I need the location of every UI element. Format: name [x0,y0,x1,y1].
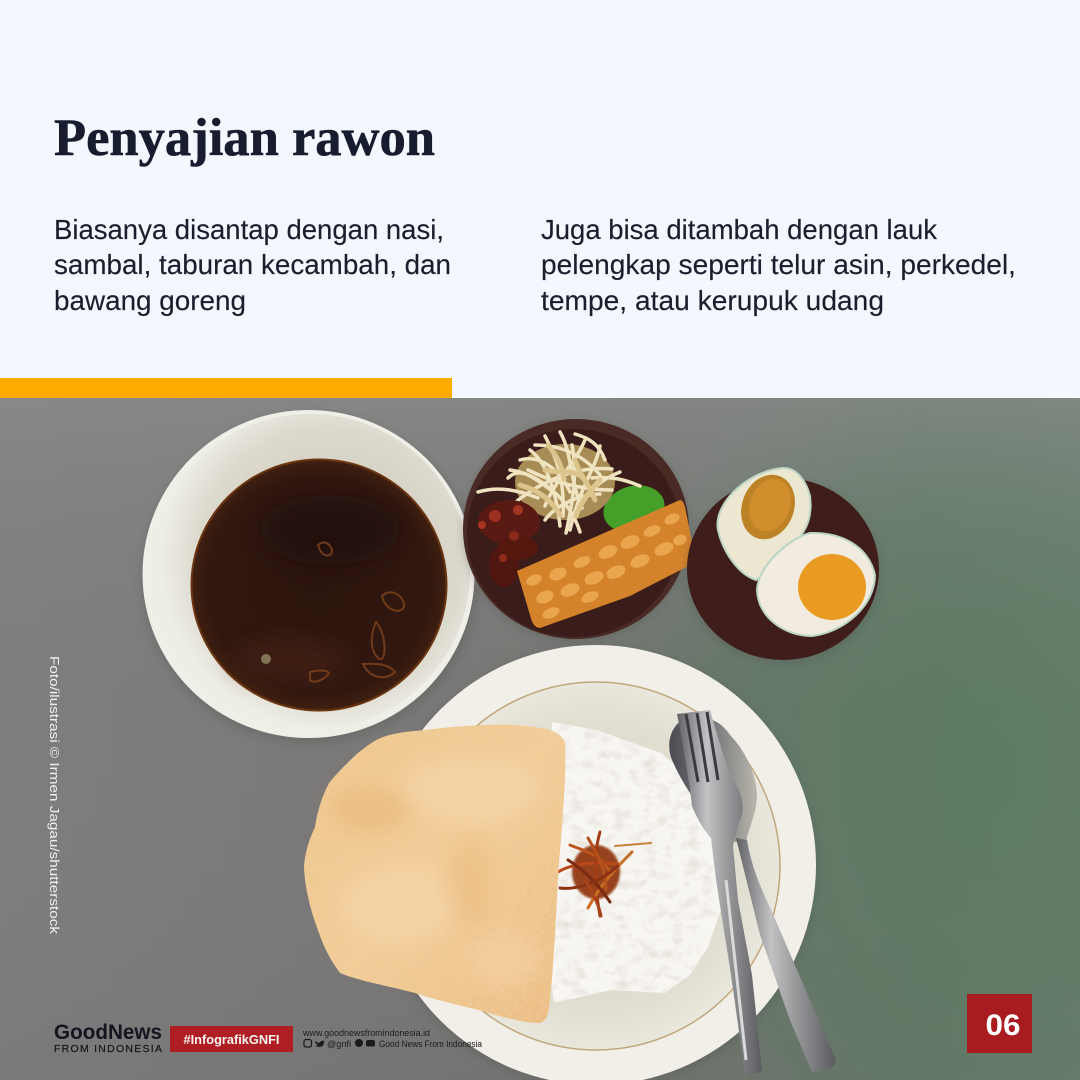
bean sprouts [478,432,640,533]
sambal [478,500,540,587]
text block: right column: Juga bisa ditambah dengan lauk [541,214,938,245]
website and social handles: Good News From Indonesia [379,1039,482,1049]
text block: left column: sambal, taburan kecambah, dan [54,249,451,280]
icon: instagram [304,1040,312,1047]
photo: rawon meal on table [0,398,1080,1080]
sides plate: bean sprouts, sambal, lime, tempeh [463,419,696,641]
lime [604,486,664,529]
fried shallots [558,832,651,916]
text block: right column [541,214,1016,316]
icon: facebook [355,1039,363,1047]
logo: GoodNews From Indonesia: GoodNews [54,1021,162,1044]
text block: left column: Biasanya disantap dengan nasi, [54,214,444,245]
fork [677,710,762,1074]
text block: left column: bawang goreng [54,285,246,316]
title: Penyajian rawon [54,109,435,167]
amber accent bar [0,378,452,398]
icon: twitter [315,1040,325,1047]
hashtag badge: #InfografikGNFI [184,1032,280,1047]
logo: GoodNews From Indonesia [54,1021,162,1055]
page number badge [967,994,1032,1053]
logo: GoodNews From Indonesia: FROM INDONESIA [54,1043,162,1055]
tempeh [517,500,696,628]
salted egg half, lower [757,533,875,636]
soup bowl [142,410,478,743]
text block: left column [54,214,451,316]
text block: right column: tempe, atau kerupuk udang [541,285,884,316]
website and social handles: @gnfi [327,1039,351,1049]
photo credit: Foto/ilustrasi © Irmen Jagau/shutterstock [47,656,62,935]
page number badge: 06 [986,1009,1020,1042]
spoon [669,717,836,1072]
icon: youtube [366,1040,375,1046]
website and social handles [302,1028,482,1049]
website and social handles: www.goodnewsfromindonesia.id [302,1028,430,1038]
prawn cracker [304,725,565,1023]
salted egg half, upper [717,467,811,580]
rice [540,722,722,1003]
salted egg plate [686,467,880,663]
text block: right column: pelengkap seperti telur asin, perkedel, [541,249,1016,280]
hashtag badge [170,1026,293,1052]
rice plate [304,645,836,1080]
